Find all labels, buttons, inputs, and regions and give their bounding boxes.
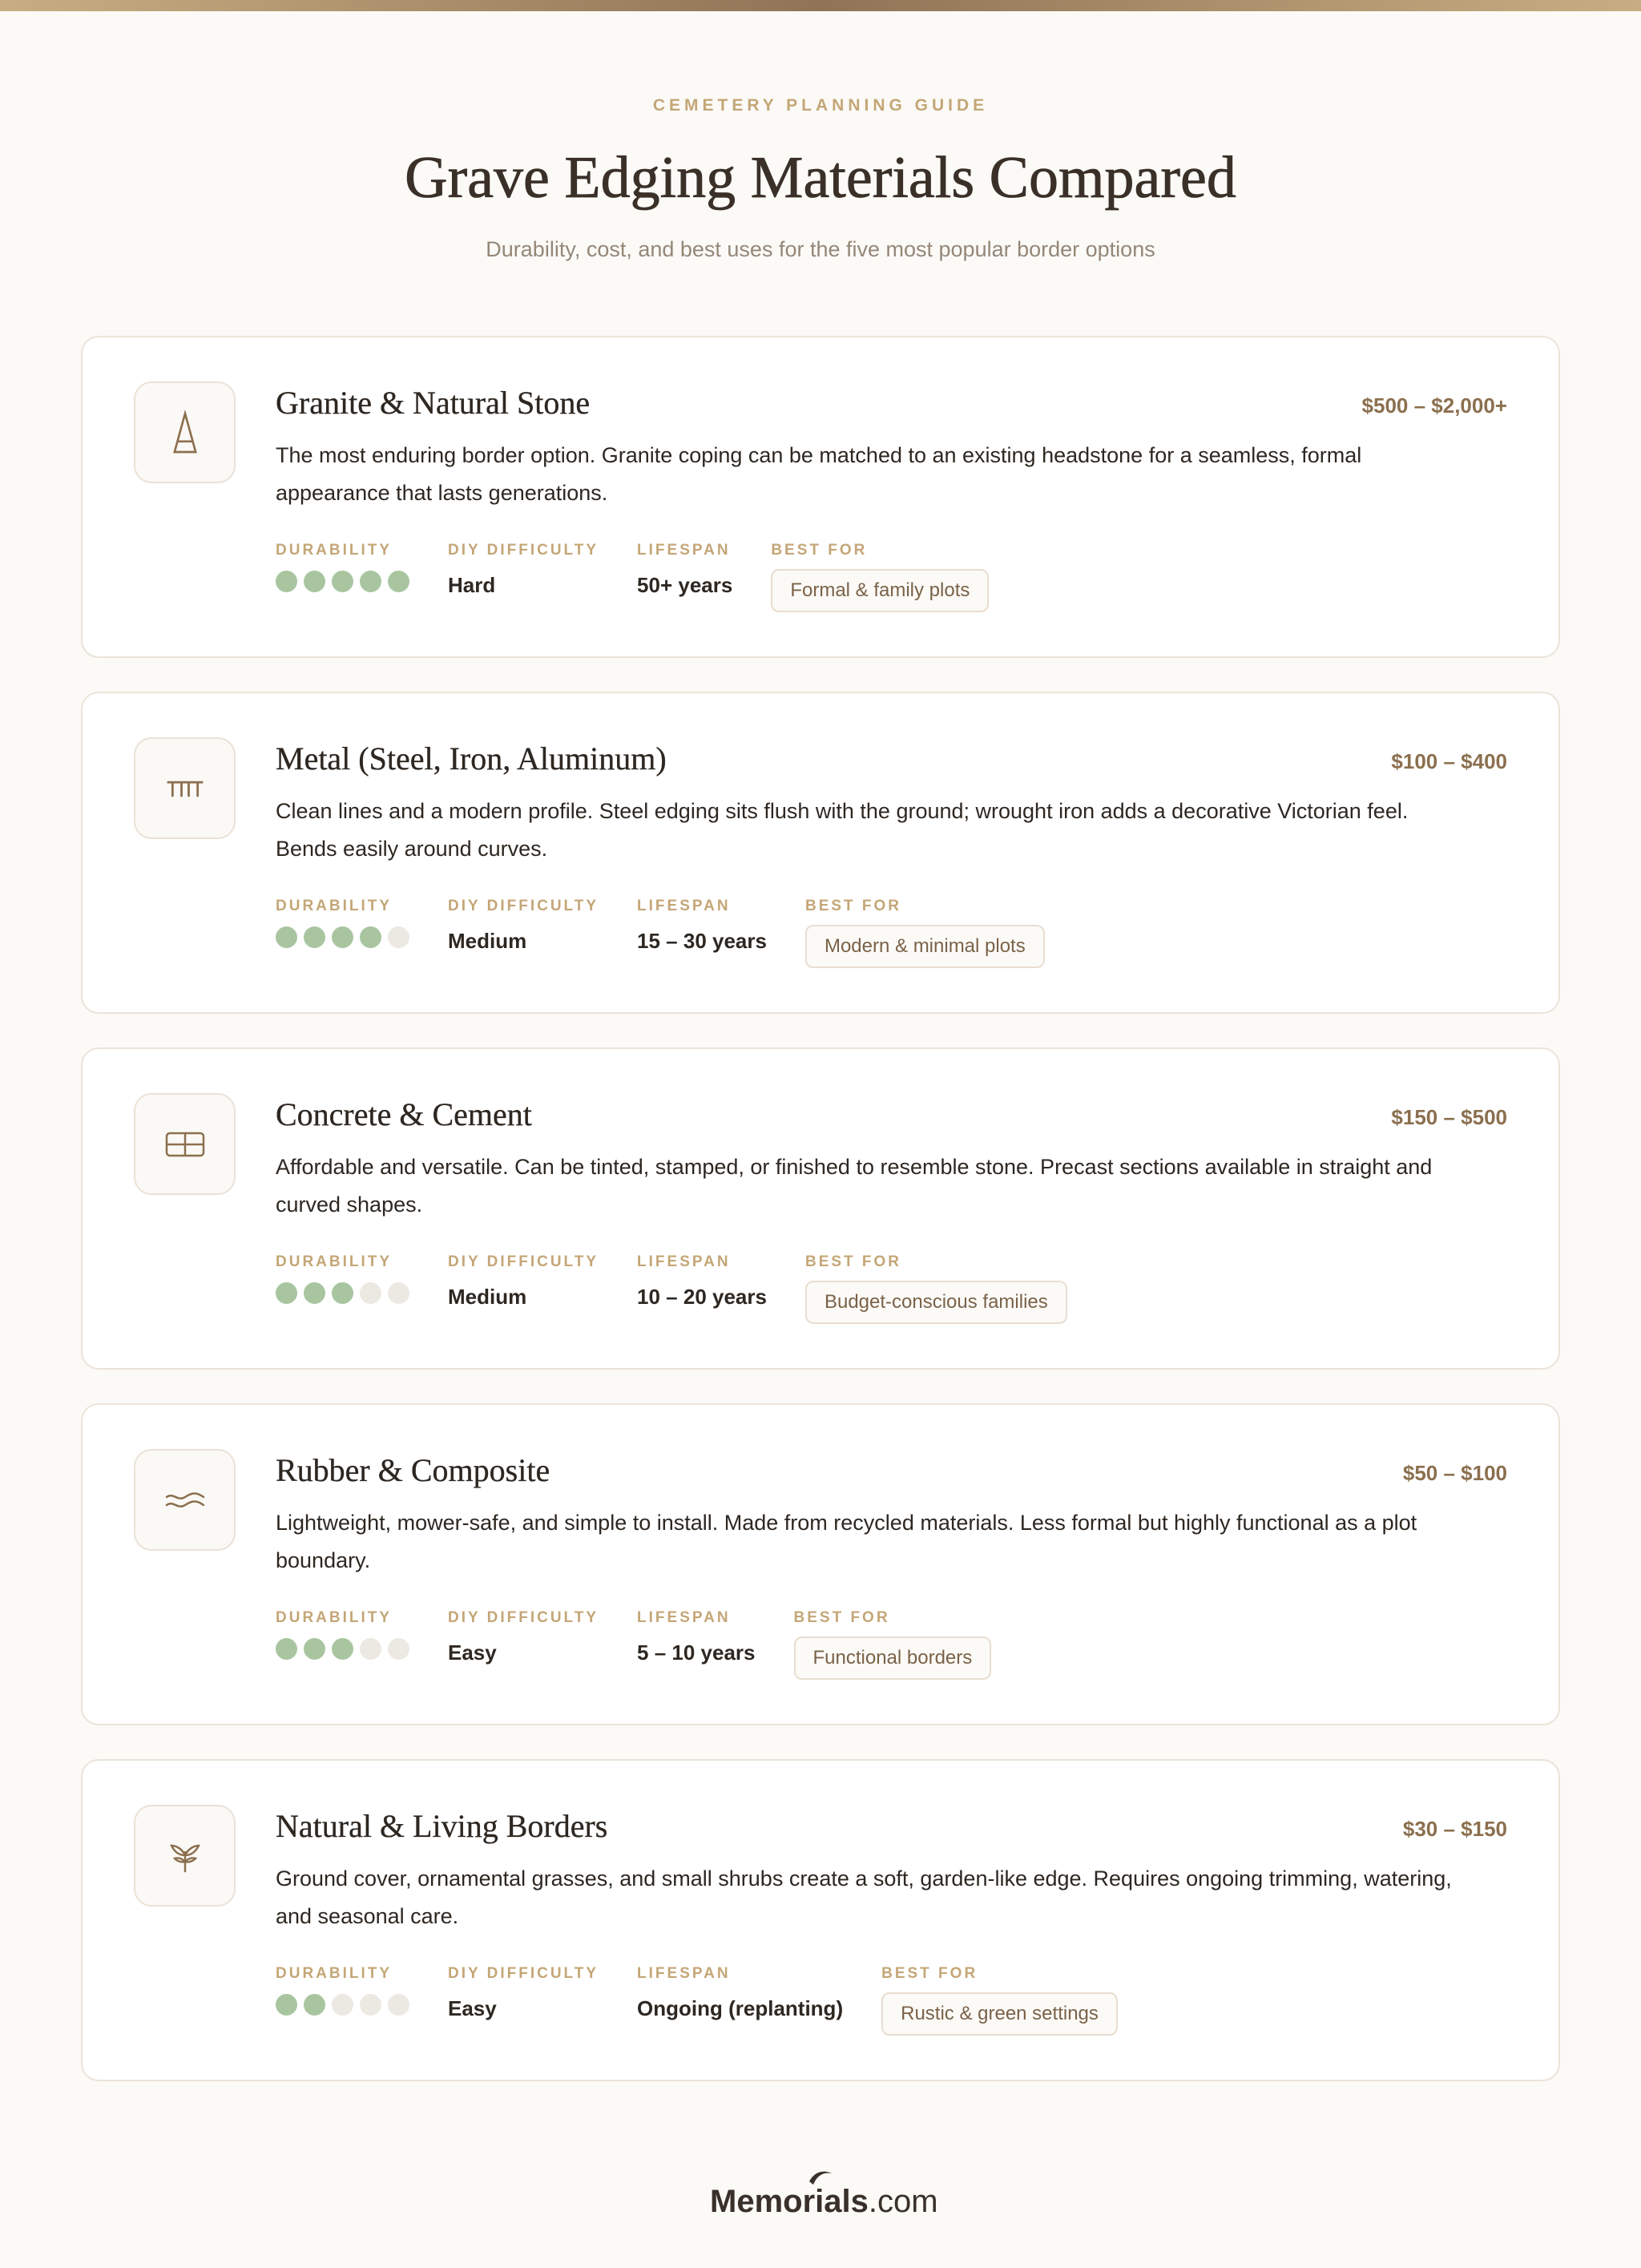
- stats row: DIY DIFFICULTY: [448, 1609, 599, 1626]
- stats row: Ongoing (replanting): [637, 1996, 843, 2020]
- stats row: DIY DIFFICULTY: [448, 898, 599, 914]
- stats row: BEST FOR: [805, 898, 901, 914]
- stats row: Medium: [448, 929, 526, 953]
- subtitle: Durability, cost, and best uses for the five most popular border options: [486, 237, 1155, 261]
- stats row: DIY DIFFICULTY: [448, 1965, 599, 1982]
- heading: Rubber & Composite: [276, 1452, 550, 1488]
- stats row: LIFESPAN: [637, 1965, 731, 1982]
- description: The most enduring border option. Granite coping can be matched to an existing headstone for a seamless, formal appearance that lasts generations.: [276, 443, 1361, 505]
- stats row: BEST FOR: [771, 542, 867, 559]
- stats row: DURABILITY: [276, 1253, 392, 1270]
- stats row: 5 – 10 years: [637, 1640, 755, 1665]
- description: Ground cover, ornamental grasses, and small shrubs create a soft, garden-like edge. Requires ongoing trimming, watering, and seasonal care.: [276, 1866, 1452, 1928]
- panel: granite: [81, 336, 1560, 658]
- stats row: DURABILITY: [276, 542, 392, 559]
- stats row: Formal & family plots: [790, 579, 970, 601]
- stats row: BEST FOR: [881, 1965, 978, 1982]
- description: Lightweight, mower-safe, and simple to install. Made from recycled materials. Less formal but highly functional as a plot boundary.: [276, 1511, 1417, 1572]
- stats row: Rustic & green settings: [901, 2003, 1099, 2024]
- stats row: DIY DIFFICULTY: [448, 1253, 599, 1270]
- panel: rubber: [81, 1403, 1560, 1725]
- stats row: Budget-conscious families: [825, 1291, 1048, 1313]
- price: $500 – $2,000+: [1362, 393, 1507, 418]
- description: Affordable and versatile. Can be tinted, stamped, or finished to resemble stone. Precast sections available in straight and curved shapes.: [276, 1155, 1432, 1217]
- stats row: [276, 542, 989, 612]
- stats row: BEST FOR: [793, 1609, 890, 1626]
- heading: Metal (Steel, Iron, Aluminum): [276, 741, 667, 777]
- price: $30 – $150: [1403, 1817, 1507, 1841]
- icon: concrete block: [134, 1093, 236, 1195]
- price: $50 – $100: [1403, 1461, 1507, 1485]
- icon: stone: [134, 381, 236, 483]
- price: $150 – $500: [1391, 1105, 1507, 1129]
- icon: metal edging: [134, 737, 236, 839]
- stats row: DURABILITY: [276, 1965, 392, 1982]
- stats row: DIY DIFFICULTY: [448, 542, 599, 559]
- stats row: 15 – 30 years: [637, 929, 767, 953]
- stats row: Hard: [448, 573, 495, 597]
- panel: concrete: [81, 1047, 1560, 1370]
- description: Clean lines and a modern profile. Steel edging sits flush with the ground; wrought iron adds a decorative Victorian feel. Bends easily around curves.: [276, 799, 1408, 861]
- stats row: Easy: [448, 1996, 497, 2020]
- stats row: 50+ years: [637, 573, 732, 597]
- stats row: Medium: [448, 1285, 526, 1309]
- stats row: LIFESPAN: [637, 1609, 731, 1626]
- stats row: Functional borders: [812, 1647, 972, 1669]
- heading: Natural & Living Borders: [276, 1808, 607, 1844]
- icon: waves: [134, 1449, 236, 1551]
- stats row: [276, 898, 1045, 968]
- icon: sprout: [134, 1805, 236, 1907]
- logo: Memorials.com: [710, 2184, 938, 2219]
- price: $100 – $400: [1391, 749, 1507, 773]
- heading: Concrete & Cement: [276, 1096, 532, 1132]
- stats row: [276, 1253, 1067, 1324]
- stats row: LIFESPAN: [637, 542, 731, 559]
- stats row: [276, 1609, 991, 1680]
- panel: natural: [81, 1759, 1560, 2081]
- stats row: Modern & minimal plots: [825, 935, 1026, 957]
- stats row: LIFESPAN: [637, 898, 731, 914]
- stats row: [276, 1965, 1118, 2036]
- stats row: LIFESPAN: [637, 1253, 731, 1270]
- title: Grave Edging Materials Compared: [405, 145, 1236, 211]
- stats row: Easy: [448, 1640, 497, 1665]
- panel: metal: [81, 692, 1560, 1014]
- heading: Granite & Natural Stone: [276, 385, 590, 421]
- stats row: DURABILITY: [276, 898, 392, 914]
- stats row: 10 – 20 years: [637, 1285, 767, 1309]
- stats row: DURABILITY: [276, 1609, 392, 1626]
- stats row: BEST FOR: [805, 1253, 901, 1270]
- eyebrow: CEMETERY PLANNING GUIDE: [653, 96, 988, 115]
